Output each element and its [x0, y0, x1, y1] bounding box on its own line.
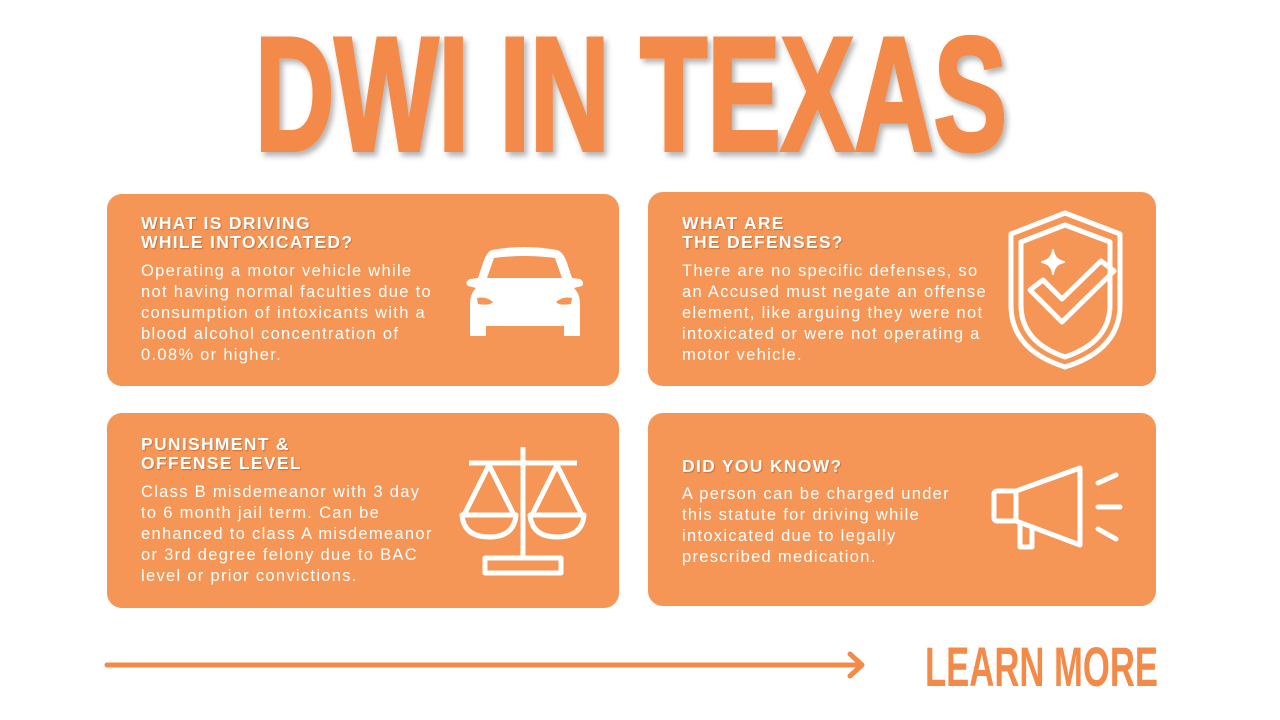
icon: scales — [460, 447, 586, 576]
text block: There are no specific defenses, so — [682, 262, 978, 280]
arrow — [104, 652, 864, 678]
text block: level or prior convictions. — [141, 567, 358, 585]
text block: enhanced to class A misdemeanor — [141, 525, 433, 543]
text block: not having normal faculties due to — [141, 283, 432, 301]
heading — [141, 213, 353, 252]
text block: intoxicated or were not operating a — [682, 325, 981, 343]
heading — [141, 434, 302, 473]
heading: PUNISHMENT & — [141, 434, 290, 454]
text block: intoxicated due to legally — [682, 527, 897, 545]
text block: A person can be charged under — [682, 485, 950, 503]
text block: blood alcohol concentration of — [141, 325, 399, 343]
heading: WHAT ARE — [682, 213, 785, 233]
heading: WHAT IS DRIVING — [141, 213, 311, 233]
text block: consumption of intoxicants with a — [141, 304, 426, 322]
panel: punishment — [107, 413, 619, 608]
text block: to 6 month jail term. Can be — [141, 504, 380, 522]
text block — [682, 485, 950, 566]
heading: DID YOU KNOW? — [682, 456, 842, 476]
panel: defenses — [648, 192, 1156, 386]
panel: did you know — [648, 413, 1156, 606]
text block — [141, 483, 433, 585]
text block: prescribed medication. — [682, 548, 877, 566]
icon: megaphone — [992, 466, 1122, 550]
text block: motor vehicle. — [682, 346, 803, 364]
text block — [682, 262, 987, 364]
text block: Operating a motor vehicle while — [141, 262, 412, 280]
heading: OFFENSE LEVEL — [141, 453, 302, 473]
text block: Class B misdemeanor with 3 day — [141, 483, 420, 501]
text block: or 3rd degree felony due to BAC — [141, 546, 418, 564]
icon: shield — [1008, 210, 1122, 370]
text block: this statute for driving while — [682, 506, 920, 524]
panel: what is driving while intoxicated — [107, 194, 619, 386]
text block: 0.08% or higher. — [141, 346, 282, 364]
text block — [141, 262, 432, 364]
heading: THE DEFENSES? — [682, 232, 844, 252]
text block: an Accused must negate an offense — [682, 283, 987, 301]
heading: WHILE INTOXICATED? — [141, 232, 353, 252]
text block: element, like arguing they were not — [682, 304, 983, 322]
heading — [682, 213, 844, 252]
icon: car — [466, 247, 584, 336]
